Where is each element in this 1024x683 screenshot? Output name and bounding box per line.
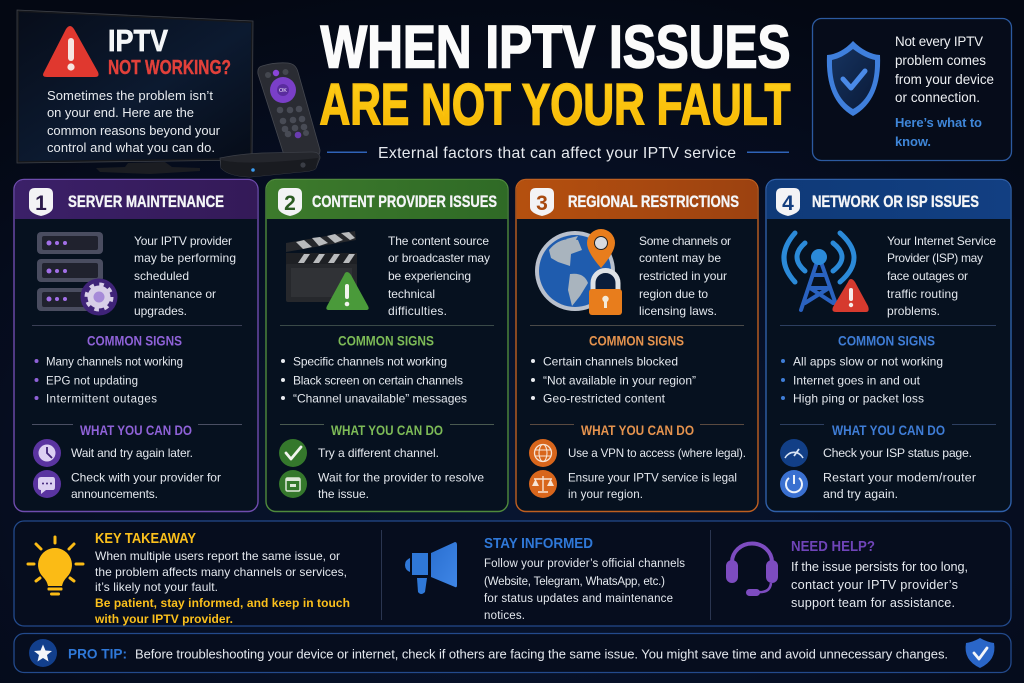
callout text: Not every IPTV — [895, 34, 983, 49]
callout text: problem comes — [895, 53, 986, 68]
remote control: OK — [279, 88, 287, 94]
common signs — [34, 334, 183, 406]
common signs — [531, 334, 696, 406]
TV body text: Sometimes the problem isn’t — [47, 88, 213, 103]
what you can do: and try again. — [823, 487, 898, 501]
icon: red warning triangle — [43, 26, 99, 77]
TV headline — [108, 23, 231, 79]
description: difficulties. — [388, 304, 447, 318]
description — [887, 234, 996, 318]
TV body text — [47, 88, 221, 155]
what you can do: WHAT YOU CAN DO — [80, 423, 192, 438]
description: Provider (ISP) may — [887, 251, 983, 265]
subtitle: External factors that can affect your IPTV service — [378, 145, 736, 162]
what you can do: Try a different channel. — [318, 446, 439, 460]
common signs: All apps slow or not working — [793, 354, 943, 368]
common signs: “Channel unavailable” messages — [293, 392, 467, 406]
card header: 4 — [782, 192, 794, 215]
description — [134, 234, 236, 318]
panel: 3 regional restrictions — [516, 180, 758, 512]
description — [388, 234, 490, 318]
panel: pro tip — [14, 634, 1011, 672]
what you can do: WHAT YOU CAN DO — [832, 423, 945, 438]
key takeaway text: the problem affects many channels or services, — [95, 565, 347, 579]
key takeaway text: it’s likely not your fault. — [95, 580, 218, 594]
what you can do: WHAT YOU CAN DO — [581, 423, 694, 438]
description: Your Internet Service — [887, 234, 996, 248]
need help text: contact your IPTV provider’s — [791, 578, 958, 592]
pro tip text: Before troubleshooting your device or internet, check if others are facing the same issue. You might save time and avoid unnecessary changes. — [135, 646, 948, 662]
remote control — [258, 63, 320, 160]
key takeaway text: KEY TAKEAWAY — [95, 531, 196, 547]
callout text: from your device — [895, 72, 994, 87]
key takeaway text: When multiple users report the same issue, or — [95, 549, 340, 563]
description: upgrades. — [134, 304, 187, 318]
what you can do: Wait for the provider to resolve — [318, 470, 484, 484]
TV with IPTV not working message — [17, 10, 253, 174]
panel: 2 content provider issues — [266, 180, 508, 512]
stay informed text: STAY INFORMED — [484, 536, 593, 552]
card header — [267, 180, 507, 219]
panel: 4 network or ISP issues — [766, 180, 1011, 512]
common signs: Specific channels not working — [293, 354, 447, 368]
card header: NETWORK OR ISP ISSUES — [812, 193, 979, 211]
card header: 2 — [284, 192, 296, 215]
common signs: Internet goes in and out — [793, 374, 921, 388]
what you can do: in your region. — [568, 488, 643, 501]
common signs: High ping or packet loss — [793, 392, 924, 406]
need help text: NEED HELP? — [791, 539, 875, 555]
what you can do — [33, 423, 221, 501]
common signs: Intermittent outages — [46, 394, 157, 406]
description: may be performing — [134, 251, 236, 265]
description: Your IPTV provider — [134, 234, 232, 248]
TV body text: control and what you can do. — [47, 140, 215, 155]
what you can do: Restart your modem/router — [823, 470, 976, 484]
stay informed text: for status updates and maintenance — [484, 593, 673, 605]
callout text: or connection. — [895, 90, 980, 105]
set-top box — [220, 152, 320, 177]
need help text: support team for assistance. — [791, 596, 955, 610]
panel: not every problem callout — [812, 18, 1012, 160]
common signs: EPG not updating — [46, 376, 138, 388]
icon: clapperboard with warning — [286, 231, 369, 310]
callout text — [895, 34, 994, 149]
card header — [15, 180, 257, 219]
what you can do — [279, 423, 484, 501]
callout text: know. — [895, 134, 931, 149]
description: be experiencing — [388, 269, 471, 283]
icon: globe, pin and padlock — [535, 229, 622, 315]
common signs: Many channels not working — [46, 356, 183, 368]
description: The content source — [388, 234, 489, 248]
description: content may be — [639, 251, 721, 265]
common signs: Geo-restricted content — [543, 392, 666, 406]
card header: SERVER MAINTENANCE — [68, 193, 224, 211]
need help text: If the issue persists for too long, — [791, 560, 968, 574]
icon: light bulb — [28, 537, 83, 596]
TV body text: on your end. Here are the — [47, 105, 194, 120]
common signs: Certain channels blocked — [543, 354, 678, 368]
description: restricted in your — [639, 269, 727, 283]
icon: signal tower with warning — [784, 233, 869, 312]
icon: star badge — [29, 639, 57, 667]
key takeaway text — [94, 531, 350, 626]
key takeaway text: with your IPTV provider. — [94, 612, 233, 626]
need help text — [791, 539, 968, 610]
common signs: COMMON SIGNS — [338, 334, 434, 348]
what you can do: WHAT YOU CAN DO — [331, 423, 443, 438]
card header: 3 — [536, 192, 548, 215]
description: technical — [388, 287, 435, 301]
description: scheduled — [134, 269, 189, 283]
description: maintenance or — [134, 287, 216, 301]
common signs: “Not available in your region” — [543, 374, 696, 388]
what you can do: announcements. — [71, 487, 158, 501]
TV headline: IPTV — [108, 23, 168, 58]
key takeaway text: Be patient, stay informed, and keep in touch — [95, 596, 350, 610]
common signs: COMMON SIGNS — [838, 334, 935, 348]
card header: REGIONAL RESTRICTIONS — [568, 193, 739, 211]
what you can do — [529, 423, 746, 501]
description: face outages or — [887, 269, 968, 283]
what you can do: Ensure your IPTV service is legal — [568, 472, 737, 484]
description: Some channels or — [639, 234, 731, 248]
what you can do: Use a VPN to access (where legal). — [568, 447, 746, 460]
TV headline: NOT WORKING? — [108, 57, 231, 79]
icon: headset — [726, 544, 778, 596]
icon: megaphone — [405, 542, 457, 594]
stay informed text: Follow your provider’s official channels — [484, 558, 685, 570]
description: or broadcaster may — [388, 251, 490, 265]
pro tip text: PRO TIP: — [68, 646, 127, 662]
common signs: COMMON SIGNS — [589, 334, 684, 348]
common signs: COMMON SIGNS — [87, 334, 182, 348]
what you can do: Check with your provider for — [71, 470, 221, 484]
title: WHEN IPTV ISSUES — [320, 14, 790, 80]
icon: shield check — [827, 41, 880, 116]
panel: bottom information strip — [14, 521, 1011, 626]
card header: CONTENT PROVIDER ISSUES — [312, 193, 497, 211]
panel: 1 server maintenance — [14, 180, 258, 512]
card header: 1 — [35, 192, 47, 215]
icon: server rack with gear — [37, 232, 118, 316]
description: licensing laws. — [639, 304, 717, 318]
common signs — [781, 334, 943, 406]
stay informed text: notices. — [484, 610, 525, 622]
stay informed text — [484, 536, 685, 622]
callout text: Here’s what to — [895, 115, 982, 130]
card header — [517, 180, 757, 219]
description: problems. — [887, 304, 940, 318]
what you can do — [780, 423, 976, 501]
title: ARE NOT YOUR FAULT — [320, 72, 790, 138]
icon: check shield — [966, 638, 994, 668]
common signs — [281, 334, 467, 406]
description — [639, 234, 731, 318]
card header — [767, 180, 1010, 219]
description: region due to — [639, 287, 708, 301]
stay informed text: (Website, Telegram, WhatsApp, etc.) — [484, 576, 665, 588]
common signs: Black screen on certain channels — [293, 374, 463, 388]
description: traffic routing — [887, 287, 958, 301]
what you can do: Wait and try again later. — [71, 446, 193, 460]
TV body text: common reasons beyond your — [47, 123, 221, 138]
title — [320, 14, 790, 138]
what you can do: the issue. — [318, 487, 369, 501]
what you can do: Check your ISP status page. — [823, 446, 972, 460]
